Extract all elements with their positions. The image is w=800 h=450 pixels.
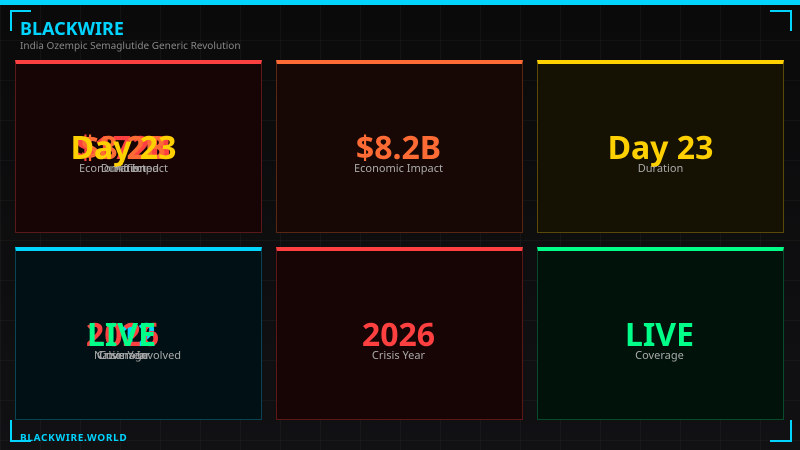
top accent bar	[0, 0, 800, 5]
stat: economic impact: Economic Impact	[354, 161, 443, 176]
corner bracket: bottom right	[770, 420, 792, 442]
corner bracket: top left	[10, 10, 31, 31]
overlapping stat values and labels: Nations Involved	[94, 348, 181, 363]
panel: economic impact	[276, 60, 523, 233]
stat: crisis year: 2026	[362, 313, 435, 356]
panel: stacked stats, bottom left	[15, 247, 262, 420]
overlapping stat values and labels: 2026	[86, 313, 159, 356]
corner bracket: bottom left	[10, 420, 31, 442]
title: BLACKWIRE	[20, 17, 124, 41]
overlapping stat values and labels: LIVE	[87, 313, 156, 356]
stat: economic impact: $8.2B	[356, 126, 441, 169]
subtitle: India Ozempic Semaglutide Generic Revolution	[20, 38, 241, 52]
corner bracket: top right	[770, 10, 792, 31]
overlapping stat values and labels: $8.2B	[81, 126, 166, 169]
overlapping stat values and labels: $172B	[76, 126, 171, 169]
overlapping stat values and labels: Coverage	[99, 348, 148, 363]
overlapping stat values and labels: Crisis Year	[97, 348, 150, 363]
panel: coverage	[537, 247, 784, 420]
stat: crisis year: Crisis Year	[372, 348, 425, 363]
overlapping stat values and labels: Duration	[101, 161, 146, 176]
stat: coverage: LIVE	[625, 313, 694, 356]
panel: stacked stats, top left	[15, 60, 262, 233]
overlapping stat values and labels: Affected	[116, 161, 159, 176]
stat: duration: Duration	[638, 161, 683, 176]
panel: crisis year	[276, 247, 523, 420]
overlapping stat values and labels: Day 23	[71, 126, 176, 169]
overlapping stat values and labels: 12	[119, 313, 156, 356]
stat: duration: Day 23	[608, 126, 713, 169]
overlapping stat values and labels: Economic Impact	[79, 161, 168, 176]
footer brand: BLACKWIRE.WORLD	[20, 430, 127, 444]
panel: duration	[537, 60, 784, 233]
overlapping stat values and labels	[86, 313, 181, 363]
stat: coverage: Coverage	[635, 348, 684, 363]
